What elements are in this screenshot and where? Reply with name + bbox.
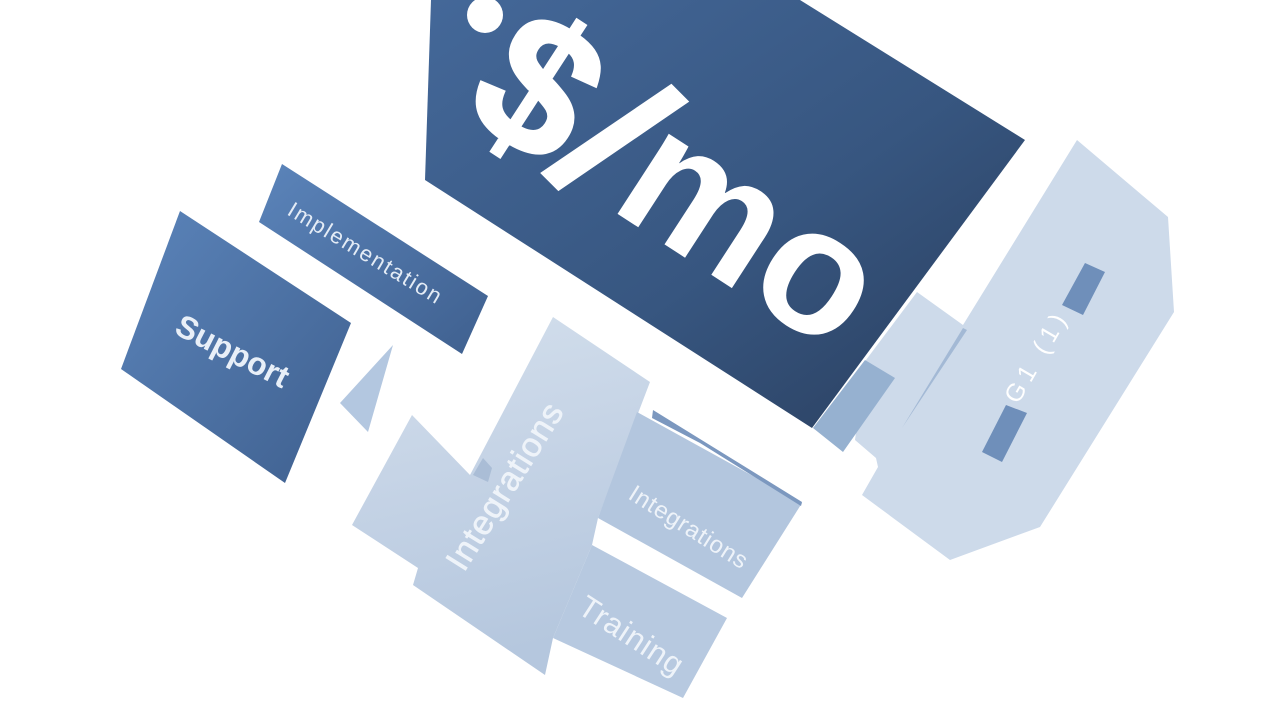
- panel: integrations small card: Integrations: [624, 480, 753, 575]
- price text: mo: [586, 71, 922, 387]
- panel: implementation bar: [259, 164, 488, 354]
- panel: price tag: [425, 0, 1025, 428]
- panel: integrations: Integrations: [439, 396, 571, 577]
- panel: training: [553, 545, 727, 698]
- panel: integrations: [352, 317, 650, 675]
- panel: support: Support: [170, 307, 296, 395]
- panel: training: Training: [572, 589, 690, 682]
- price text: /: [504, 10, 722, 268]
- panel: support: [121, 211, 351, 483]
- icon: triangle pointer: [340, 345, 393, 432]
- panel: implementation bar: Implementation: [283, 197, 446, 308]
- panel: right tier card: G1 (1): [999, 309, 1072, 408]
- panel: right tier card: [813, 140, 1174, 560]
- icon: tag hole: [467, 0, 503, 33]
- panel: integrations small card: [598, 410, 802, 598]
